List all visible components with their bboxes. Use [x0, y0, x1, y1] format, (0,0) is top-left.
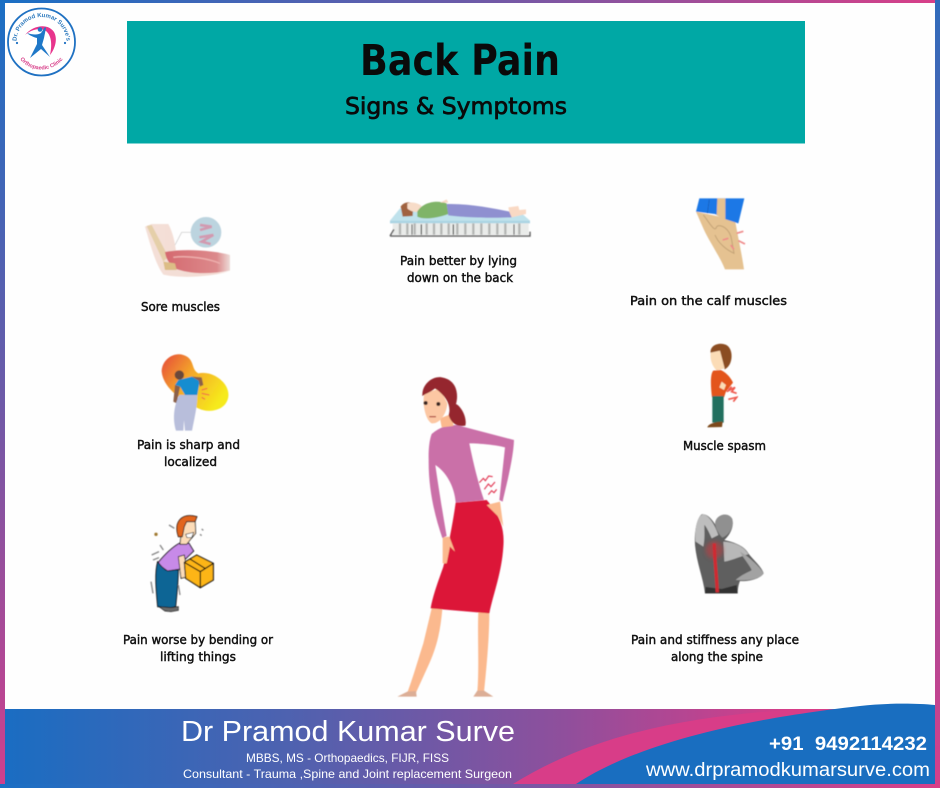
label: bending: lifting things [160, 650, 236, 664]
neck [440, 413, 453, 427]
red spine [714, 543, 717, 592]
hair [422, 377, 466, 426]
footer band [0, 704, 940, 788]
face [424, 388, 447, 423]
arm [178, 555, 188, 578]
logo badge [7, 8, 76, 76]
logo clinic text: Orthopaedic Clinic [20, 58, 62, 70]
box [184, 555, 213, 588]
illustration: woman holding lower back [397, 377, 514, 697]
label: spasm: Muscle spasm [683, 439, 766, 453]
blue swoosh [576, 704, 935, 784]
raised arm [695, 514, 718, 547]
logo pink arc [25, 26, 56, 55]
label: pain better by lying: down on the back [407, 271, 513, 285]
icon: lying on mattress [390, 199, 530, 236]
title banner [127, 21, 805, 144]
hands [443, 537, 455, 563]
icon: calf [696, 198, 745, 269]
label: spine [631, 633, 799, 664]
head [715, 514, 733, 538]
label: calf: Pain on the calf muscles [630, 294, 787, 308]
label: pain better by lying [400, 254, 517, 285]
qualifications: MBBS, MS - Orthopaedics, FIJR, FISS [246, 751, 449, 765]
shirt [158, 543, 194, 571]
label: spine: Pain and stiffness any place [631, 633, 799, 647]
icon: man lifting box [151, 516, 213, 612]
label: sharp pain [137, 438, 240, 469]
title: Back Pain [360, 36, 560, 86]
strain marks [151, 525, 203, 595]
icon: sharp pain person [162, 354, 228, 431]
back torso [695, 514, 764, 593]
face [178, 518, 196, 544]
label: sharp pain: localized [164, 455, 217, 469]
website: www.drpramodkumarsurve.com [645, 760, 930, 781]
label: bending [123, 633, 273, 664]
lower back [705, 585, 738, 593]
phone: +91 9492114232 [769, 734, 927, 755]
label: bending: Pain worse by bending or [123, 633, 273, 647]
doctor name: Dr Pramod Kumar Surve [181, 716, 515, 748]
label: spine: along the spine [671, 650, 763, 664]
icon: sore muscles [145, 217, 230, 277]
hair [177, 516, 197, 537]
trousers [156, 562, 178, 608]
pink top [429, 425, 514, 538]
skirt [431, 500, 504, 613]
subtitle: Signs & Symptoms [345, 92, 567, 120]
legs [407, 608, 442, 693]
logo figure [27, 27, 50, 58]
label: sharp pain: Pain is sharp and [137, 438, 240, 452]
role: Consultant - Trauma ,Spine and Joint replacement Surgeon [183, 767, 512, 781]
shoulder highlight [723, 542, 748, 562]
icon: muscle spasm man [707, 344, 737, 427]
side arm [736, 552, 764, 580]
logo arc text: Dr. Pramod Kumar Surve's [12, 12, 70, 41]
label: sore muscles: Sore muscles [141, 300, 220, 314]
label: pain better by lying: Pain better by lying [400, 254, 517, 268]
pink swoosh [513, 709, 935, 784]
red spine glow [706, 541, 723, 559]
pain marks [479, 476, 497, 495]
icon: back with red spine [695, 514, 764, 593]
